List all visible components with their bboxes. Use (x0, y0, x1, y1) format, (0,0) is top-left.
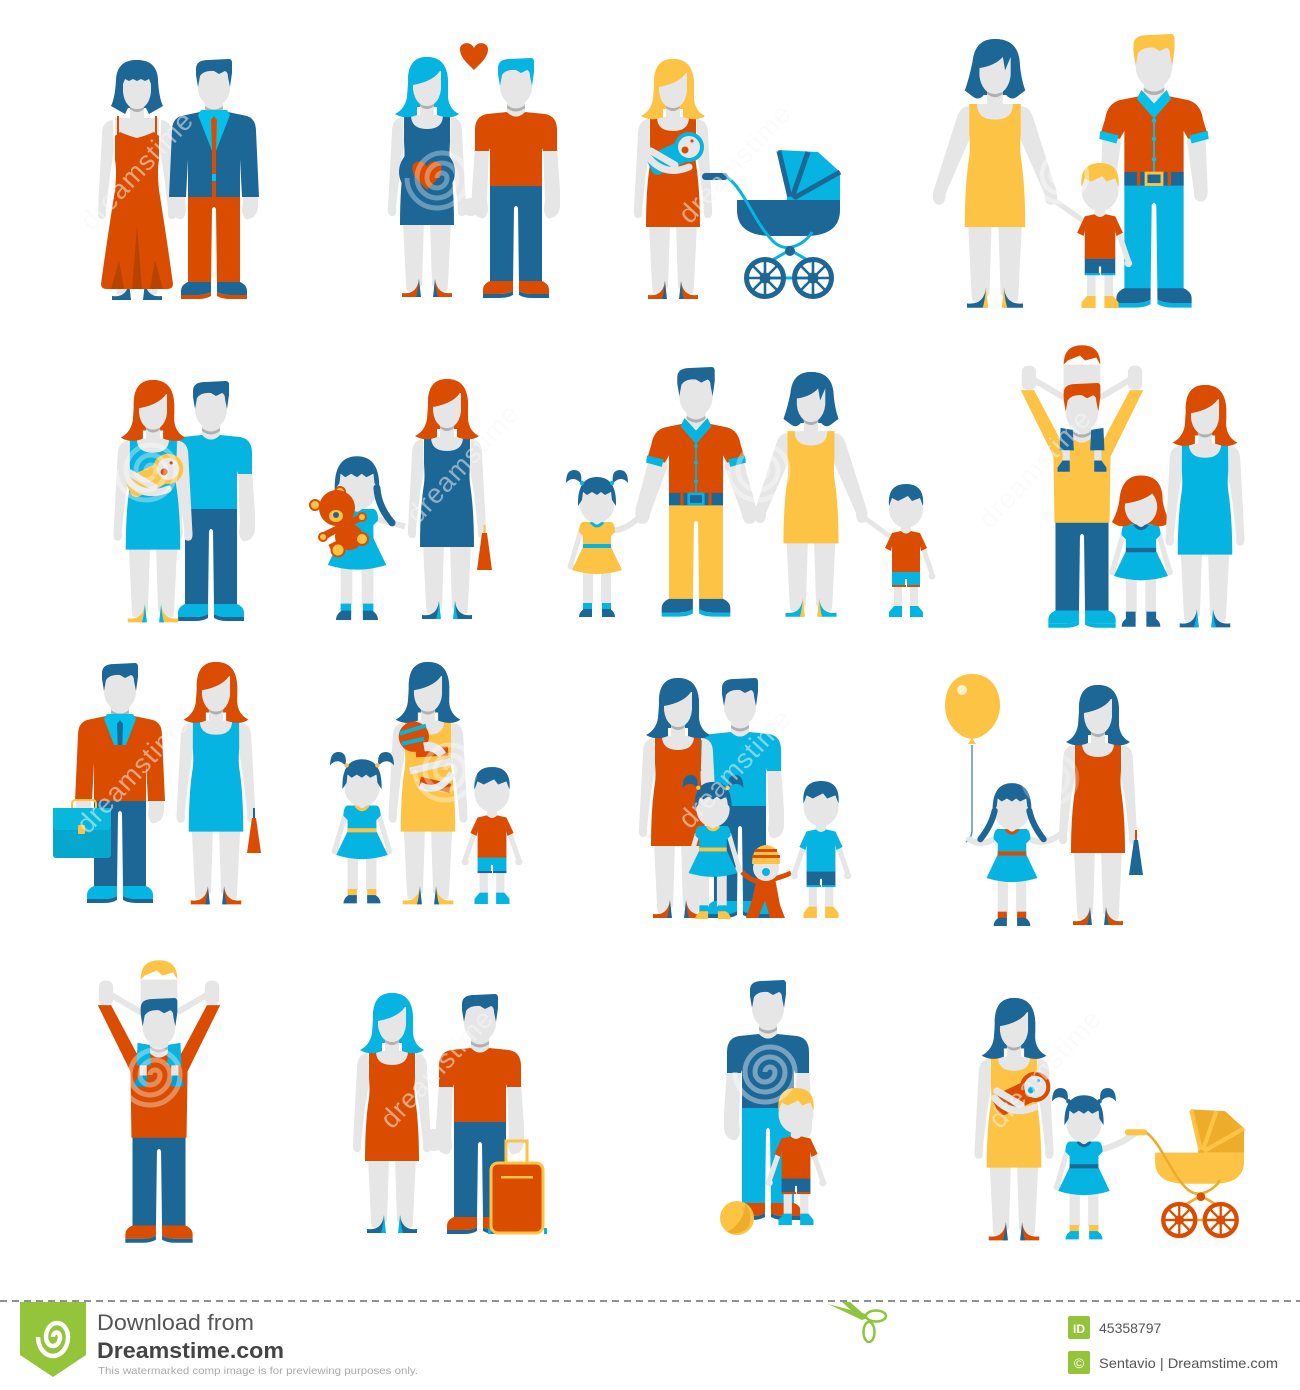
boy in cyan tee (791, 781, 851, 918)
girl with bear (328, 456, 405, 620)
icon: ball (720, 1201, 754, 1235)
man in orange top with child (98, 960, 220, 1243)
footer: dreamstime download bar (0, 1301, 1300, 1377)
boy in orange tee (1048, 163, 1132, 308)
family: mother and daughter with teddy bear (310, 379, 492, 620)
pregnant woman (388, 57, 466, 297)
man in orange shirt and cyan trousers (1099, 34, 1209, 308)
mother holding baby (634, 59, 712, 299)
family: parents with son (933, 34, 1209, 308)
footer author credit: © (1074, 1355, 1085, 1371)
watermark spirals and text: dreamstime (74, 105, 199, 236)
orange bag (247, 808, 261, 853)
mother with baby (388, 662, 468, 904)
footer image id: 45358797 (1099, 1320, 1162, 1336)
footer author credit: Sentavio | Dreamstime.com (1099, 1355, 1278, 1371)
girl with braids (969, 783, 1059, 926)
footer heading: This watermarked comp image is for previewing purposes only. (98, 1365, 418, 1377)
girl in cyan dress (330, 752, 394, 903)
watermark spirals and text: dreamstime (672, 98, 797, 229)
boy in orange tee (462, 767, 522, 904)
family: father with child on shoulders (98, 960, 220, 1243)
icon: heart (460, 43, 488, 70)
mother with baby (974, 998, 1054, 1240)
family: working couple (53, 662, 261, 904)
man in red sweater (75, 663, 165, 903)
yellow stroller (1125, 1109, 1244, 1236)
family: travelling couple (353, 993, 547, 1234)
watermark spirals and text: dreamstime (400, 398, 525, 529)
watermark spirals and text: dreamstime (972, 403, 1097, 534)
girl in cyan dress (683, 775, 743, 919)
family: parents with two children holding hands (566, 367, 936, 617)
footer logo ribbon (20, 1302, 86, 1377)
family: parents with newborn (113, 380, 255, 622)
watermark spirals and text: dreamstime (672, 703, 797, 834)
orange handbag (477, 525, 492, 570)
family: mother with baby and stroller (634, 59, 840, 299)
family: mother and daughter with balloon (945, 674, 1143, 926)
man in orange shirt and yellow trousers (635, 367, 757, 617)
woman in cyan dress (176, 662, 256, 904)
woman in long orange dress (98, 60, 176, 300)
icon: suitcase (488, 1141, 547, 1234)
woman in yellow dress (933, 39, 1057, 308)
icon: briefcase (53, 800, 111, 858)
crawling baby (742, 845, 791, 918)
watermark spirals and text: dreamstime (70, 708, 195, 839)
man in orange tee (436, 994, 524, 1234)
boy in orange tee (866, 484, 936, 617)
girl with red hair (1109, 476, 1173, 627)
man in navy jacket and orange trousers (169, 59, 259, 299)
footer heading: Dreamstime.com (97, 1338, 284, 1363)
balloon (945, 674, 1000, 842)
family: father and son with ball (720, 980, 826, 1235)
family: parents with three children (639, 678, 851, 919)
family: father carrying child with daughter and mother (1021, 345, 1245, 628)
footer image id (1068, 1316, 1162, 1339)
man in yellow top with child on shoulders (1021, 345, 1143, 628)
clasped hands (461, 198, 481, 216)
footer heading: Download from (97, 1310, 254, 1335)
woman in orange dress (639, 678, 717, 918)
footer author credit (1068, 1351, 1278, 1374)
girl in yellow dress (566, 470, 641, 617)
woman in cyan dress (1165, 385, 1245, 627)
woman in navy dress (408, 379, 486, 619)
footer heading (97, 1310, 418, 1377)
family: mother, baby, daughter and yellow stroller (974, 998, 1244, 1240)
woman in orange dress (353, 993, 431, 1233)
family: expecting couple (388, 43, 560, 298)
mother with baby (113, 380, 193, 622)
man in cyan tee (696, 678, 784, 918)
man in orange tee (472, 58, 560, 298)
navy bag (1129, 830, 1143, 875)
watermark spirals and text: dreamstime (374, 1003, 499, 1134)
clasped hands (423, 1129, 445, 1151)
footer image id: ID (1073, 1322, 1085, 1336)
man in navy tee and cyan trousers (724, 980, 812, 1220)
boy in orange tee (766, 1088, 826, 1225)
watermark spirals and text: dreamstime (982, 1003, 1107, 1134)
icon: teddy bear (310, 487, 368, 556)
woman in yellow dress (754, 372, 868, 617)
family: couple in evening wear (98, 59, 259, 300)
man in cyan tee (167, 381, 255, 621)
icon: scissors (828, 1302, 886, 1342)
navy stroller (702, 150, 840, 296)
family: mother with baby, girl and boy (330, 662, 522, 904)
girl with pigtails (1052, 1088, 1136, 1239)
woman in orange dress (1059, 685, 1137, 925)
watermark spirals and text (70, 98, 1107, 1134)
